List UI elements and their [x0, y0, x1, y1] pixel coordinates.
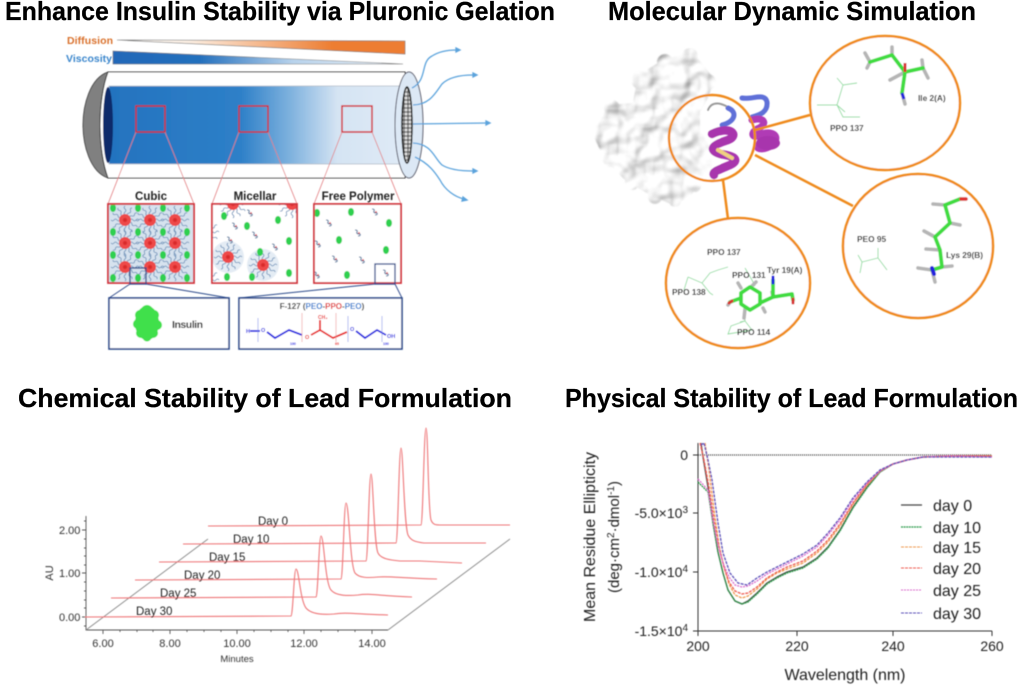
- title: chemical stability: Chemical Stability of Lead Formulation: [18, 383, 512, 413]
- x tick labels: 260: [980, 638, 1004, 654]
- icon: insulin blob: [133, 305, 162, 342]
- x axis title: Wavelength (nm): [784, 667, 906, 684]
- axis labels: 2.00: [59, 525, 80, 537]
- circle: Tyr 19(A): PPO 138: [672, 287, 706, 297]
- circle: Tyr 19(A): [666, 218, 810, 348]
- circle: Lys 29(B): PEO 95: [857, 234, 886, 244]
- day labels: Day 20: [184, 570, 220, 582]
- panel: micellar: [210, 190, 299, 285]
- circle: Ile 2(A): PPO 137: [830, 123, 864, 133]
- protein surface: [593, 48, 716, 207]
- zoom connectors: blue: [109, 264, 402, 298]
- panel: molecular dynamics: [593, 36, 993, 348]
- axis labels: 10.00: [223, 638, 251, 650]
- chemical chain: H: [246, 329, 250, 335]
- axis labels: 1.00: [59, 568, 80, 580]
- circle: Ile 2(A): [810, 36, 960, 170]
- y tick labels: 3: [682, 505, 688, 516]
- day labels: Day 10: [233, 534, 269, 546]
- axis labels: AU: [44, 565, 56, 581]
- circle: Tyr 19(A): PPO 131: [732, 270, 766, 280]
- y tick labels: 0: [680, 447, 688, 463]
- chemical chain: O: [261, 328, 266, 334]
- day labels: Day 25: [160, 588, 196, 600]
- title: physical stability: Physical Stability of Lead Formulation: [565, 383, 1018, 413]
- viscosity wedge: Viscosity: [66, 53, 112, 65]
- y axis title: Mean Residue Ellipticity: [582, 452, 599, 622]
- panel: micellar: Micellar: [234, 191, 277, 203]
- chemical chain: 100: [383, 342, 389, 346]
- legend: day 15: [933, 540, 981, 557]
- y axis title: 2: [606, 532, 617, 538]
- circle: Tyr 19(A): Tyr 19(A): [767, 265, 803, 275]
- chart: circular dichroism: [582, 443, 1004, 684]
- axis labels: 0.00: [59, 612, 80, 624]
- x tick labels: [686, 638, 1004, 654]
- y tick labels: 4: [682, 623, 688, 634]
- helix: left: [708, 104, 735, 175]
- axis labels: 14.00: [358, 638, 386, 650]
- legend: day 30: [933, 606, 981, 623]
- x tick labels: 240: [881, 638, 905, 654]
- viscosity wedge: [66, 51, 403, 65]
- curves: [698, 443, 992, 604]
- y tick labels: -1.0×10: [635, 564, 682, 580]
- panel: cubic: [108, 191, 194, 283]
- y axis title: [582, 452, 623, 622]
- day labels: Day 30: [136, 606, 172, 618]
- day labels: [136, 516, 288, 618]
- circle: Ile 2(A): Ile 2(A): [918, 93, 946, 103]
- circle: Lys 29(B): [843, 174, 993, 318]
- panel: insulin: Insulin: [172, 319, 203, 331]
- legend: day 25: [933, 583, 981, 600]
- y axis title: -1: [606, 486, 617, 495]
- legend: [901, 498, 981, 623]
- y tick labels: 4: [682, 564, 688, 575]
- chemical chain: O: [350, 327, 355, 333]
- chemical chain: O: [305, 335, 310, 341]
- panel: gelation schematic: [66, 35, 490, 349]
- x tick labels: 220: [785, 638, 809, 654]
- panel: F-127 structure: [239, 298, 402, 349]
- axis labels: 6.00: [92, 638, 114, 650]
- panel: cubic: Cubic: [135, 191, 168, 203]
- diffusion wedge: Diffusion: [67, 35, 113, 47]
- y axis title: ): [606, 481, 623, 486]
- chart: chromatogram: [44, 428, 510, 665]
- y tick labels: -1.5×10: [635, 623, 682, 639]
- y axis title: (deg·cm: [606, 538, 623, 593]
- chemical chain: [246, 313, 395, 346]
- surface fade: [690, 105, 720, 195]
- zero line: [698, 454, 992, 456]
- circle: Tyr 19(A): PPO 114: [737, 327, 771, 337]
- legend: day 0: [933, 498, 972, 515]
- chemical chain: OH: [387, 334, 395, 340]
- circle: Tyr 19(A): PPO 137: [707, 247, 741, 257]
- zoom markers: [108, 106, 401, 204]
- panel: free polymer: Free Polymer: [322, 191, 395, 203]
- y tick labels: [635, 447, 688, 639]
- axis labels: [44, 525, 386, 665]
- x tick labels: 200: [686, 638, 710, 654]
- circle: Lys 29(B): Lys 29(B): [946, 250, 983, 260]
- legend: day 10: [933, 520, 981, 537]
- panel: insulin: [109, 298, 229, 349]
- axis labels: 12.00: [290, 638, 318, 650]
- axis labels: 8.00: [159, 638, 181, 650]
- chemical chain: 100: [290, 342, 296, 346]
- panel: F-127 structure: F-127 (PEO-PPO-PEO): [280, 302, 365, 311]
- axes: [82, 516, 510, 634]
- chemical chain: 65: [335, 342, 339, 346]
- circle: focus: [669, 95, 755, 181]
- cylinder: [83, 72, 423, 178]
- traces: [85, 428, 510, 617]
- day labels: Day 15: [209, 552, 245, 564]
- axes: [693, 443, 992, 636]
- diffusion wedge: [67, 35, 405, 54]
- day labels: Day 0: [258, 516, 288, 528]
- helix: right: [742, 97, 780, 150]
- y axis title: ·dmol: [606, 495, 623, 532]
- connectors: [723, 115, 853, 219]
- legend: day 20: [933, 561, 981, 578]
- chemical chain: CH₃: [318, 315, 328, 321]
- axis labels: Minutes: [220, 654, 254, 665]
- y tick labels: -5.0×10: [635, 505, 682, 521]
- outflow arrows: [412, 48, 490, 201]
- panel: free polymer: [314, 191, 401, 283]
